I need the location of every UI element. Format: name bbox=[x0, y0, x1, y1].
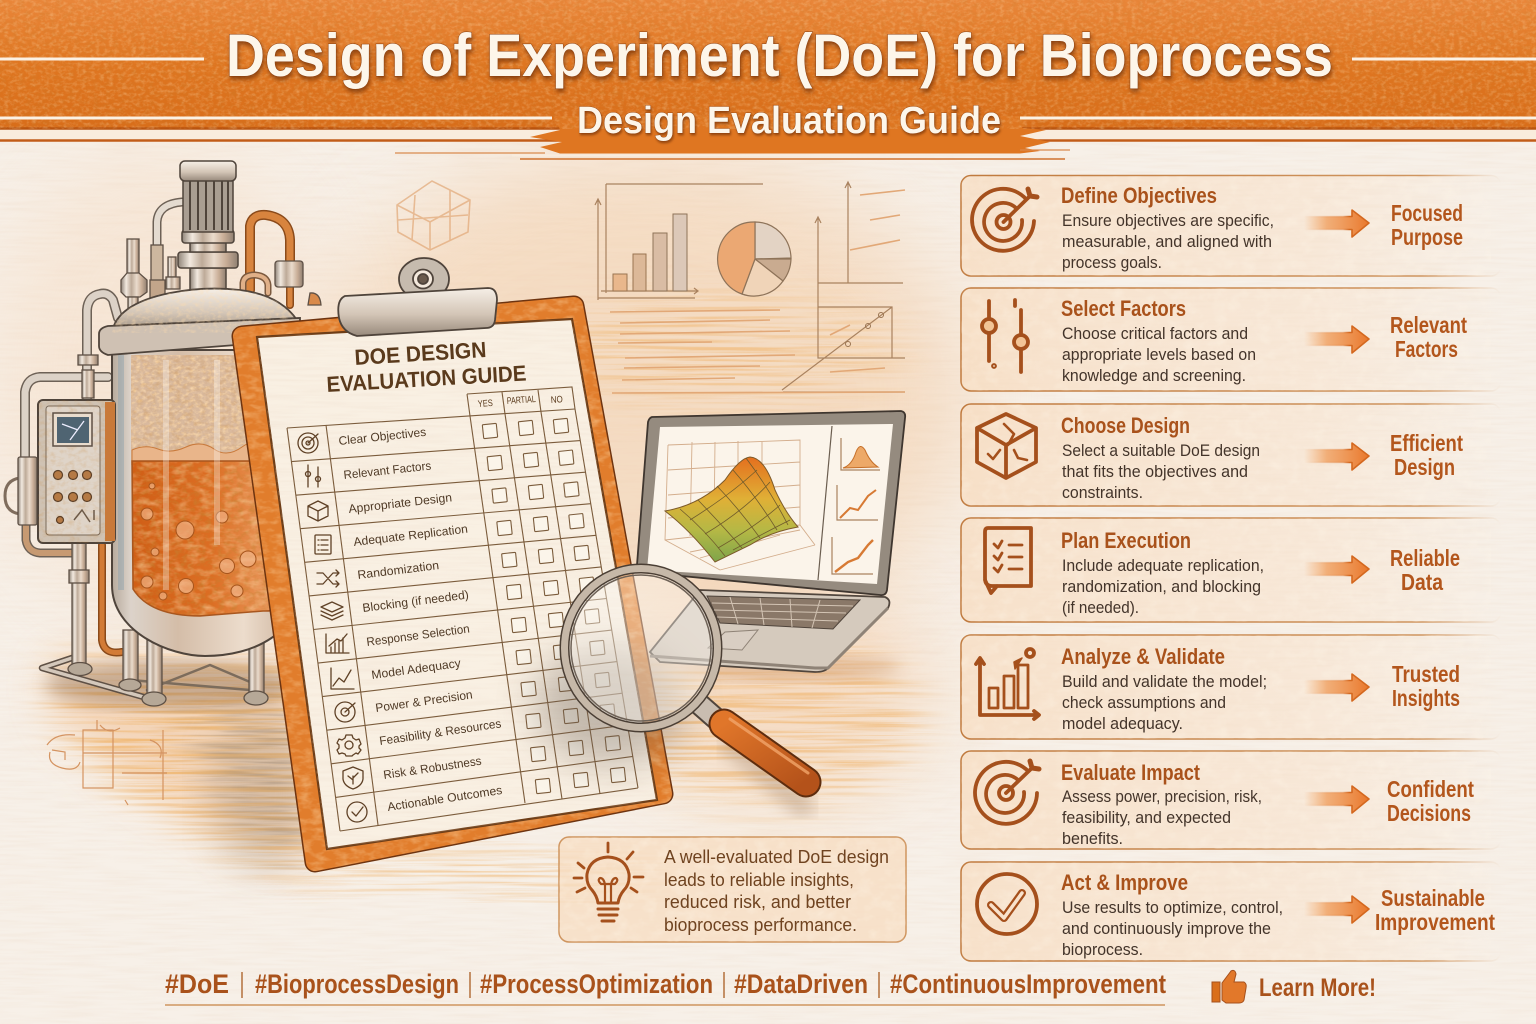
card description: Choose critical factors and bbox=[1062, 324, 1248, 343]
laptop keyboard bbox=[707, 596, 860, 629]
clipboard bbox=[242, 258, 663, 862]
card description: constraints. bbox=[1062, 483, 1143, 502]
icon: thumbs up bbox=[1212, 970, 1246, 1003]
card description: process goals. bbox=[1062, 253, 1162, 272]
background sketch: note lines bbox=[610, 310, 905, 393]
card description: (if needed). bbox=[1062, 598, 1139, 617]
icon: cube bbox=[977, 414, 1036, 478]
outcome label: Relevant bbox=[1390, 312, 1467, 338]
checklist row labels: Clear Objectives bbox=[338, 425, 427, 448]
fermenter fittings bbox=[18, 239, 321, 525]
card heading: Select Factors bbox=[1061, 296, 1186, 321]
outcome label bbox=[1390, 545, 1460, 595]
laptop side charts bbox=[818, 426, 880, 580]
card description bbox=[1062, 787, 1262, 848]
card heading: Act & Improve bbox=[1061, 870, 1188, 895]
checklist row labels: Blocking (if needed) bbox=[362, 587, 470, 615]
outcome label bbox=[1390, 312, 1467, 362]
magnifying glass bbox=[564, 568, 810, 812]
icon: target bbox=[972, 189, 1037, 251]
card heading: Evaluate Impact bbox=[1061, 760, 1201, 785]
card description bbox=[1062, 672, 1267, 733]
background sketch: pie chart bbox=[718, 222, 791, 296]
outcome label: Improvement bbox=[1375, 909, 1495, 935]
outcome label bbox=[1392, 661, 1460, 711]
clipboard paper bbox=[257, 319, 657, 849]
outcome label bbox=[1375, 885, 1495, 935]
checklist row labels: Power & Precision bbox=[374, 687, 473, 715]
hashtags footer: #BioprocessDesign bbox=[255, 969, 459, 999]
checklist row icons bbox=[298, 433, 367, 822]
card heading: Choose Design bbox=[1061, 413, 1190, 438]
card description: check assumptions and bbox=[1062, 693, 1226, 712]
checklist grid bbox=[287, 387, 638, 831]
panel: select factors bbox=[961, 288, 1501, 391]
callout text: A well-evaluated DoE design bbox=[664, 847, 889, 867]
clipboard frame bbox=[242, 306, 663, 862]
outcome label: Factors bbox=[1395, 336, 1458, 362]
fermenter bioreactor bbox=[5, 161, 321, 709]
magnifier handle shadow bbox=[725, 740, 810, 812]
card description: benefits. bbox=[1062, 829, 1123, 848]
arrow bbox=[1304, 896, 1369, 923]
checklist row labels: Response Selection bbox=[366, 622, 471, 649]
card description: Assess power, precision, risk, bbox=[1062, 787, 1262, 806]
card description: bioprocess. bbox=[1062, 940, 1143, 959]
callout: takeaway bbox=[559, 837, 906, 942]
hashtags footer: #ProcessOptimization bbox=[480, 969, 713, 999]
checklist column headers: YES bbox=[477, 398, 493, 410]
callout text: bioprocess performance. bbox=[664, 915, 857, 935]
card heading: Plan Execution bbox=[1061, 528, 1191, 553]
magnifier shadow bbox=[535, 645, 685, 765]
magnifier lens bbox=[567, 572, 715, 724]
card description: Include adequate replication, bbox=[1062, 556, 1264, 575]
panel: plan execution bbox=[961, 518, 1501, 622]
background sketch: lower-left diagram bbox=[47, 720, 167, 805]
laptop screen bbox=[637, 411, 905, 595]
hashtags footer: #DataDriven bbox=[734, 969, 868, 999]
checklist column headers bbox=[477, 394, 563, 410]
hashtags footer: #DoE bbox=[165, 969, 229, 999]
fermenter piping bbox=[5, 202, 290, 652]
checklist column headers: PARTIAL bbox=[506, 394, 536, 407]
outcome label bbox=[1387, 776, 1474, 826]
card description: model adequacy. bbox=[1062, 714, 1183, 733]
icon: sliders bbox=[982, 300, 1028, 372]
title: Design of Experiment (DoE) for Bioprocess bbox=[226, 22, 1333, 89]
outcome label bbox=[1390, 430, 1463, 480]
arrow bbox=[1304, 326, 1369, 353]
checklist row labels: Risk & Robustness bbox=[382, 754, 482, 782]
icon: growth chart bbox=[976, 649, 1039, 719]
checklist row labels: Randomization bbox=[357, 558, 440, 582]
outcome label: Reliable bbox=[1390, 545, 1460, 571]
checklist row labels: Feasibility & Resources bbox=[378, 716, 502, 748]
checklist row labels: Relevant Factors bbox=[343, 459, 432, 482]
card description: that fits the objectives and bbox=[1062, 462, 1248, 481]
card description: Ensure objectives are specific, bbox=[1062, 211, 1274, 230]
checklist row labels: Model Adequacy bbox=[371, 656, 462, 682]
outcome label: Purpose bbox=[1391, 224, 1463, 250]
outcome label bbox=[1391, 200, 1463, 250]
checklist column headers: NO bbox=[550, 394, 563, 406]
icon: light bulb bbox=[574, 843, 643, 921]
clipboard clip bbox=[338, 258, 497, 336]
outcome label: Trusted bbox=[1392, 661, 1460, 687]
arrow bbox=[1304, 674, 1369, 701]
laptop bbox=[637, 411, 905, 681]
3D response surface bbox=[665, 457, 798, 562]
arrow bbox=[1304, 556, 1369, 583]
clipboard heading: EVALUATION GUIDE bbox=[326, 361, 527, 397]
arrow bbox=[1304, 443, 1369, 470]
fermenter bubbles bbox=[141, 483, 256, 600]
icon: target bbox=[975, 761, 1039, 824]
card description bbox=[1062, 211, 1274, 272]
card description: appropriate levels based on bbox=[1062, 345, 1256, 364]
panel: evaluate impact bbox=[961, 751, 1501, 849]
card description: Use results to optimize, control, bbox=[1062, 898, 1283, 917]
clipboard heading: DOE DESIGN bbox=[354, 337, 487, 370]
fermenter dome and flange bbox=[99, 289, 300, 355]
3D plot grid bbox=[665, 440, 815, 570]
call to action: Learn More! bbox=[1259, 974, 1376, 1002]
checklist row labels bbox=[338, 425, 503, 814]
callout text bbox=[664, 847, 889, 935]
subtitle: Design Evaluation Guide bbox=[577, 100, 1001, 142]
panel: choose design bbox=[961, 404, 1501, 506]
outcome label: Decisions bbox=[1387, 800, 1471, 826]
outcome label: Data bbox=[1401, 569, 1443, 595]
fermenter foam bbox=[132, 442, 290, 461]
checklist row labels: Adequate Replication bbox=[353, 522, 469, 549]
callout text: leads to reliable insights, bbox=[664, 870, 854, 890]
outcome label: Efficient bbox=[1390, 430, 1463, 456]
card description: and continuously improve the bbox=[1062, 919, 1271, 938]
outcome label: Sustainable bbox=[1381, 885, 1485, 911]
outcome label: Insights bbox=[1392, 685, 1460, 711]
outcome label: Focused bbox=[1391, 200, 1463, 226]
card description bbox=[1062, 556, 1264, 617]
arrow bbox=[1304, 786, 1369, 813]
panel: act and improve bbox=[961, 862, 1501, 961]
laptop base bbox=[650, 590, 889, 672]
checklist row labels: Appropriate Design bbox=[348, 490, 453, 516]
fermenter control panel bbox=[38, 400, 115, 543]
outcome label: Confident bbox=[1387, 776, 1474, 802]
fermenter liquid bbox=[132, 461, 292, 616]
background sketch: wireframe cube bbox=[397, 181, 470, 250]
magnifier rim bbox=[564, 568, 718, 728]
card heading: Define Objectives bbox=[1061, 183, 1217, 208]
hashtags footer bbox=[165, 969, 1166, 1005]
background sketch: bar chart bbox=[595, 184, 763, 300]
hashtags footer: #ContinuousImprovement bbox=[890, 969, 1166, 999]
fermenter vessel body bbox=[112, 350, 300, 656]
fermenter glass window bbox=[131, 355, 291, 465]
background sketch: axes and scatter plot bbox=[782, 182, 905, 392]
panel: analyze and validate bbox=[961, 635, 1501, 739]
card description bbox=[1062, 898, 1283, 959]
checklist checkboxes bbox=[482, 418, 626, 794]
icon: check circle bbox=[977, 874, 1037, 934]
clipboard heading bbox=[326, 337, 527, 397]
fermenter motor bbox=[178, 161, 238, 290]
arrow bbox=[1304, 210, 1369, 237]
card description: Select a suitable DoE design bbox=[1062, 441, 1260, 460]
magnifier neck bbox=[698, 703, 722, 724]
icon: checklist document bbox=[985, 528, 1031, 593]
callout text: reduced risk, and better bbox=[664, 892, 851, 912]
card description bbox=[1062, 441, 1260, 502]
card description: randomization, and blocking bbox=[1062, 577, 1261, 596]
outcome label: Design bbox=[1394, 454, 1455, 480]
card description: measurable, and aligned with bbox=[1062, 232, 1272, 251]
checklist row labels: Actionable Outcomes bbox=[386, 783, 503, 814]
card description bbox=[1062, 324, 1256, 385]
panel: define objectives bbox=[961, 176, 1501, 276]
card description: knowledge and screening. bbox=[1062, 366, 1246, 385]
card heading: Analyze & Validate bbox=[1061, 644, 1225, 669]
magnifier handle bbox=[724, 724, 806, 782]
fermenter base frame bbox=[42, 656, 250, 700]
card description: feasibility, and expected bbox=[1062, 808, 1231, 827]
fermenter legs bbox=[68, 543, 268, 706]
header banner bbox=[0, 0, 1536, 159]
card description: Build and validate the model; bbox=[1062, 672, 1267, 691]
